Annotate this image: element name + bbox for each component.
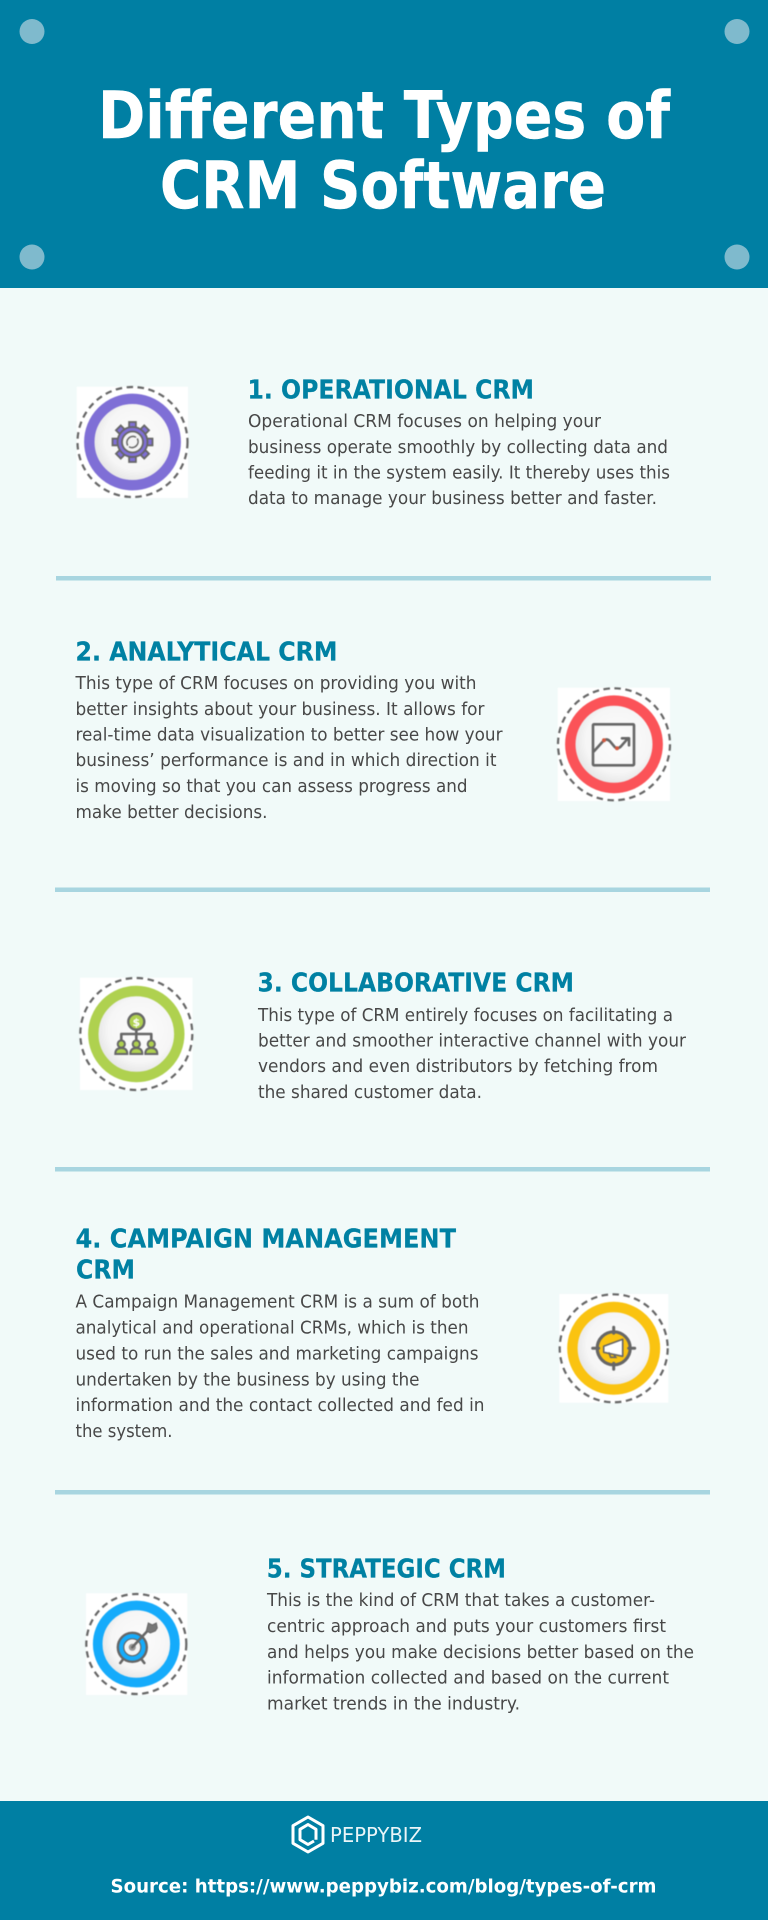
icon: gear [77, 387, 188, 498]
header banner [0, 0, 768, 288]
panel: operational CRM [77, 376, 670, 509]
text block: Operational CRM focuses on helping your [248, 411, 602, 432]
footer [0, 1801, 768, 1920]
text block: and helps you make decisions better based on the [267, 1642, 694, 1663]
text block: This type of CRM focuses on providing you with [75, 673, 477, 694]
icon: organisation chart [80, 978, 193, 1090]
text block: better and smoother interactive channel with your [258, 1031, 687, 1052]
text block: used to run the sales and marketing campaigns [76, 1344, 478, 1365]
heading: 3. COLLABORATIVE CRM [258, 969, 574, 999]
text block: undertaken by the business by using the [76, 1369, 420, 1390]
text block: the system. [76, 1421, 172, 1442]
text block: data to manage your business better and faster. [248, 488, 657, 509]
text block: A Campaign Management CRM is a sum of both [76, 1292, 480, 1313]
panel: strategic CRM [86, 1554, 694, 1715]
title: CRM Software [160, 149, 606, 224]
text block: information and the contact collected and fed in [76, 1395, 484, 1416]
panel: collaborative CRM [80, 969, 687, 1103]
text block: better insights about your business. It allows for [76, 699, 485, 720]
panel: analytical CRM [75, 638, 670, 823]
text block: the shared customer data. [258, 1082, 482, 1103]
text block: analytical and operational CRMs, which is then [76, 1318, 468, 1339]
text block [257, 1005, 687, 1103]
logo [293, 1817, 422, 1852]
heading: 2. ANALYTICAL CRM [76, 638, 338, 668]
logo: PEPPYBIZ [330, 1823, 422, 1847]
text block: feeding it in the system easily. It thereby uses this [248, 462, 670, 484]
source line: Source: https://www.peppybiz.com/blog/types-of-crm [110, 1876, 656, 1898]
heading: 5. STRATEGIC CRM [267, 1554, 506, 1584]
icon: target and arrow [86, 1593, 187, 1695]
text block: This is the kind of CRM that takes a customer- [266, 1590, 655, 1611]
text block: information collected and based on the current [267, 1668, 669, 1689]
title [98, 79, 671, 224]
heading: CRM [76, 1256, 135, 1286]
icon: megaphone target [559, 1294, 668, 1403]
heading: 4. CAMPAIGN MANAGEMENT [76, 1225, 457, 1255]
text block [266, 1590, 694, 1715]
heading: 1. OPERATIONAL CRM [248, 376, 534, 406]
title: Different Types of [98, 79, 671, 154]
text block: centric approach and puts your customers first [267, 1616, 666, 1637]
text block [75, 673, 503, 823]
text block [248, 411, 670, 509]
text block: real-time data visualization to better see how your [76, 724, 503, 746]
text block: market trends in the industry. [267, 1694, 520, 1715]
panel: campaign management CRM [76, 1225, 668, 1442]
text block: make better decisions. [76, 802, 268, 823]
text block: vendors and even distributors by fetching from [258, 1056, 658, 1077]
text block: is moving so that you can assess progress and [76, 776, 468, 797]
text block [76, 1292, 484, 1442]
text block: business operate smoothly by collecting data and [248, 437, 668, 458]
heading [76, 1225, 457, 1286]
text block: This type of CRM entirely focuses on facilitating a [257, 1005, 673, 1026]
icon: organisation chart: $ [132, 1016, 140, 1029]
text block: business’ performance is and in which direction it [76, 750, 496, 771]
icon: line chart [558, 688, 670, 801]
